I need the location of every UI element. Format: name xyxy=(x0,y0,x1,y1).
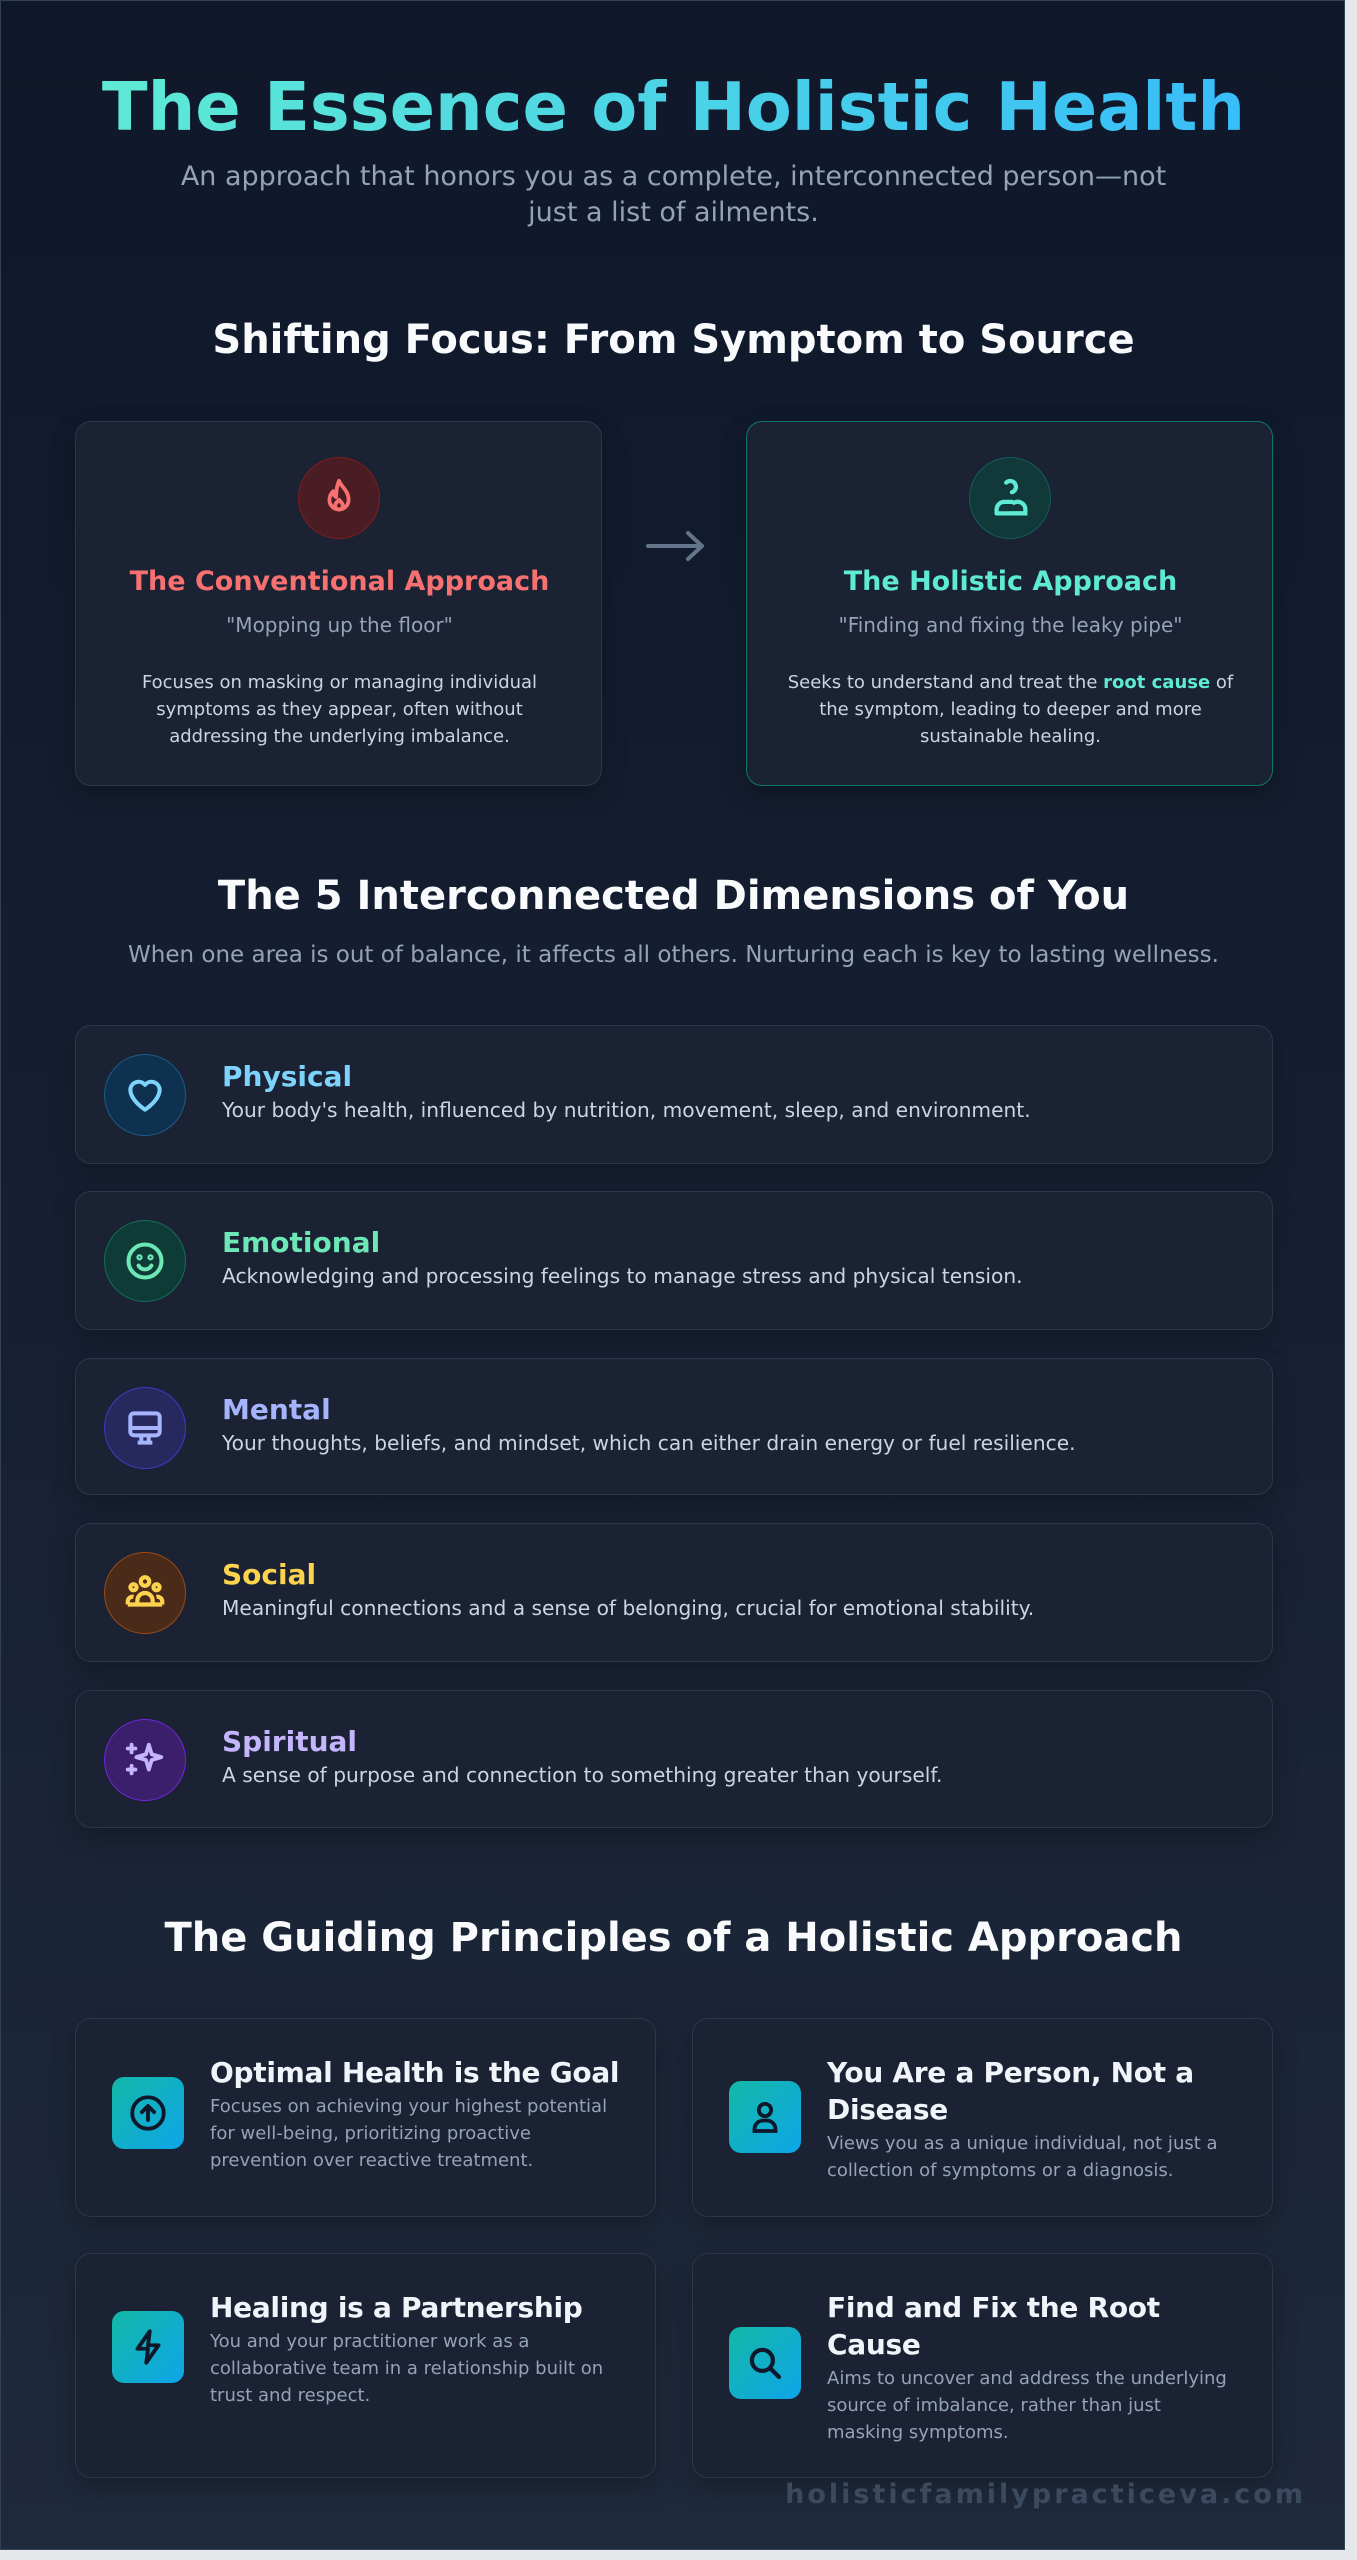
text: Focuses on achieving your highest potential for well-being, prioritizing proactive prevention over reactive treatment. xyxy=(210,2096,607,2171)
text xyxy=(827,2291,1227,2443)
icon: arrow up circle xyxy=(112,2077,184,2149)
text xyxy=(210,2291,603,2406)
icon: person xyxy=(969,457,1051,539)
subtitle: An approach that honors you as a complete, interconnected person—not just a list of ailments. xyxy=(181,161,1166,228)
panel: social xyxy=(75,1523,1273,1662)
panel: holistic approach xyxy=(746,421,1273,786)
panel: physical xyxy=(75,1025,1273,1164)
card title: The Conventional Approach xyxy=(130,566,549,597)
title: Social xyxy=(222,1558,316,1591)
text xyxy=(210,2056,619,2171)
icon: sparkles xyxy=(104,1719,186,1801)
icon: search xyxy=(729,2327,801,2399)
title: Mental xyxy=(222,1393,331,1426)
icon: bolt xyxy=(112,2311,184,2383)
panel: spiritual xyxy=(75,1690,1273,1828)
panel: person not disease xyxy=(692,2018,1273,2217)
text: Optimal Health is the Goal xyxy=(210,2056,619,2089)
heading: guiding principles: The Guiding Principles of a Holistic Approach xyxy=(164,1915,1183,1961)
heading: shifting focus: Shifting Focus: From Symptom to Source xyxy=(212,317,1135,363)
icon: smile xyxy=(104,1220,186,1302)
panel: mental xyxy=(75,1358,1273,1495)
arrow xyxy=(646,530,704,562)
panel: partnership xyxy=(75,2253,656,2478)
panel: root cause xyxy=(692,2253,1273,2478)
title: The Essence of Holistic Health xyxy=(102,68,1245,146)
description: Your thoughts, beliefs, and mindset, which can either drain energy or fuel resilience. xyxy=(222,1431,1076,1455)
icon: monitor xyxy=(104,1387,186,1469)
text: You Are a Person, Not a Disease xyxy=(827,2056,1194,2126)
heading: 5 dimensions: The 5 Interconnected Dimensions of You xyxy=(218,873,1129,919)
description: A sense of purpose and connection to something greater than yourself. xyxy=(222,1763,942,1787)
title: Emotional xyxy=(222,1226,380,1259)
text: You and your practitioner work as a collaborative team in a relationship built on trust and respect. xyxy=(210,2331,603,2406)
panel: conventional approach xyxy=(75,421,602,786)
text: Views you as a unique individual, not just a collection of symptoms or a diagnosis. xyxy=(827,2133,1218,2181)
body text: Focuses on masking or managing individual symptoms as they appear, often without addressing the underlying imbalance. xyxy=(142,672,537,747)
panel: optimal health xyxy=(75,2018,656,2217)
icon: user xyxy=(729,2081,801,2153)
text: Aims to uncover and address the underlying source of imbalance, rather than just masking symptoms. xyxy=(827,2368,1227,2443)
description: Meaningful connections and a sense of belonging, crucial for emotional stability. xyxy=(222,1596,1034,1620)
title: Physical xyxy=(222,1060,352,1093)
quote: "Mopping up the floor" xyxy=(226,613,453,637)
dimensions subtitle: When one area is out of balance, it affects all others. Nurturing each is key to lasting wellness. xyxy=(128,942,1219,968)
icon: group xyxy=(104,1552,186,1634)
body text: Seeks to understand and treat the root cause of the symptom, leading to deeper and more sustainable healing. xyxy=(788,672,1233,747)
text xyxy=(826,2056,1218,2181)
description: Acknowledging and processing feelings to manage stress and physical tension. xyxy=(222,1264,1023,1288)
card title: The Holistic Approach xyxy=(844,566,1177,597)
quote: "Finding and fixing the leaky pipe" xyxy=(838,613,1182,637)
icon: flame xyxy=(298,457,380,539)
title: Spiritual xyxy=(222,1725,357,1758)
text: Find and Fix the Root Cause xyxy=(827,2291,1160,2361)
description: Your body's health, influenced by nutrition, movement, sleep, and environment. xyxy=(222,1098,1031,1122)
text: Healing is a Partnership xyxy=(210,2291,583,2324)
panel: emotional xyxy=(75,1191,1273,1330)
footer: website: holisticfamilypracticeva.com xyxy=(785,2479,1306,2510)
icon: heart xyxy=(104,1054,186,1136)
